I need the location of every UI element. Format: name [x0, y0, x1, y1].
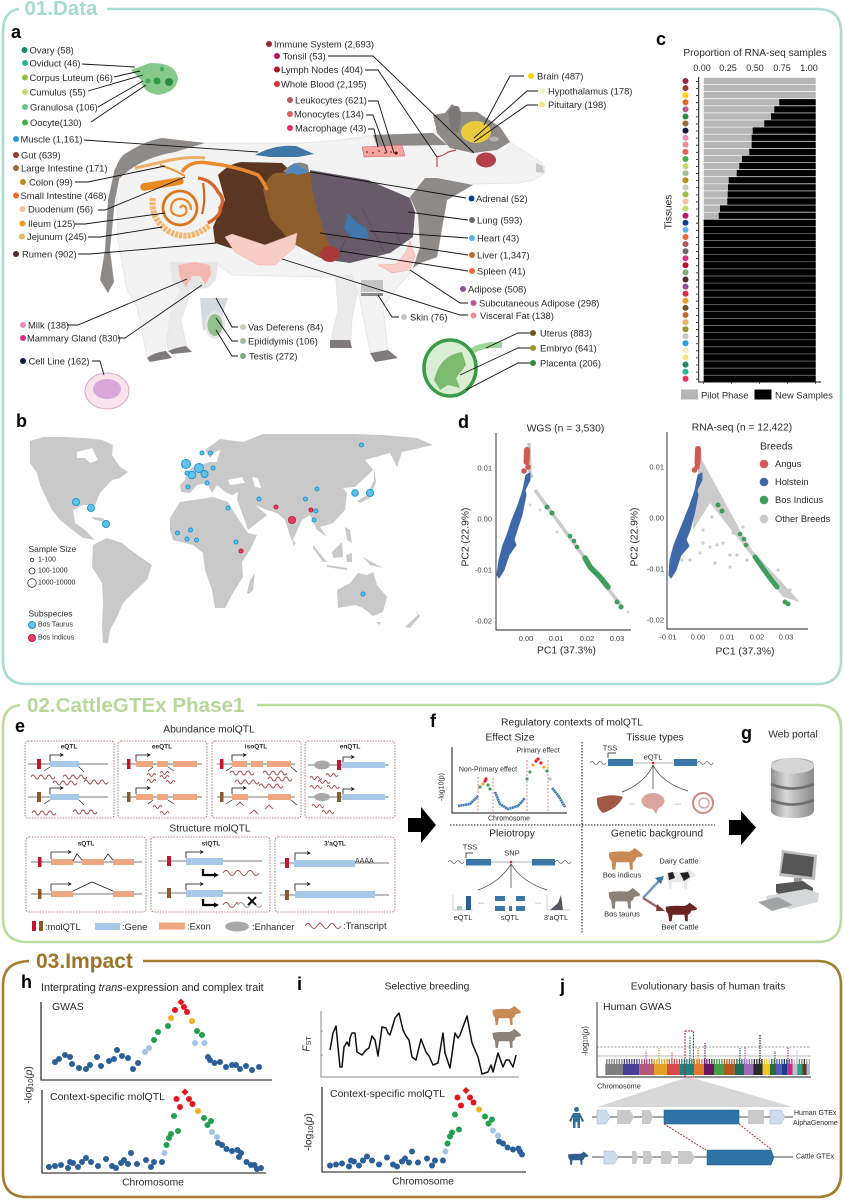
Manhattan plot: Human GWAS	[603, 1001, 671, 1013]
illustration: ovary	[131, 63, 178, 95]
arrow: e to f	[408, 807, 436, 843]
stQTL box	[151, 837, 270, 912]
PCA plot: RNA-seq: PC1 (37.3%)	[716, 646, 774, 658]
tissue labels: immune system	[266, 38, 374, 134]
tissue labels: male reproductive	[240, 322, 323, 362]
context-specific molQTL plot	[322, 1087, 526, 1172]
PCA plot: WGS: 0.01	[549, 634, 563, 643]
panel i: selective breeding: p)	[304, 1113, 314, 1122]
tissue labels: male reproductive: Vas Deferens (84)	[248, 322, 323, 332]
legend: :molQTL	[45, 922, 81, 932]
ortholog connectors	[664, 1124, 772, 1150]
FST line chart: F	[302, 1045, 312, 1052]
tissue labels: male reproductive: Epididymis (106)	[248, 336, 318, 346]
illustration: testis	[200, 298, 228, 339]
axis labels: Chromosome	[122, 1178, 184, 1188]
icon: desktop computer	[758, 850, 819, 911]
breeds legend: Other Breeds	[775, 514, 831, 524]
panel g: web portal: g	[741, 723, 752, 743]
tissue labels: thoracic and abdominal: Visceral Fat (138)	[480, 310, 554, 321]
tissue labels: thoracic and abdominal: Liver (1,347)	[477, 250, 530, 260]
tissue labels: thoracic and abdominal: Adipose (508)	[468, 284, 526, 294]
heading: Interprating trans-expression and complex trait	[41, 982, 264, 994]
bos taurus sample sites	[72, 443, 374, 596]
panel b: world map of samples	[16, 411, 433, 643]
PCA plot: WGS: 0.01	[477, 464, 492, 472]
pleiotropy diagram: TSS	[463, 842, 477, 852]
PCA plot: WGS: 0.03	[610, 634, 624, 643]
panel i: selective breeding	[297, 974, 526, 1188]
Manhattan plot	[580, 1001, 811, 1090]
tissue labels: muscle and gut: Small Intestine (468)	[20, 190, 106, 201]
panel i: selective breeding: 10	[308, 1126, 314, 1134]
pleiotropy diagram: SNP	[504, 848, 520, 858]
heading: Regulatory contexts: Regulatory contexts of molQTL	[501, 718, 643, 728]
genetic background diagram: Bos indicus	[603, 870, 641, 880]
axis labels: Chromosome	[392, 1176, 454, 1188]
tissue labels: brain	[528, 70, 632, 110]
genetic background diagram: Beef Cattle	[661, 922, 699, 932]
panel h: trans-expression: -log	[24, 1087, 34, 1104]
legend	[681, 390, 833, 400]
tissue labels: immune system: Leukocytes (621)	[295, 94, 367, 106]
eQTL box	[25, 741, 114, 818]
panel c: stacked bar chart of RNA-seq proportion: c	[656, 29, 666, 49]
PCA plot: RNA-seq	[630, 422, 808, 658]
effect size chart: Effect Size	[485, 732, 535, 744]
pleiotropy diagram: ...	[478, 898, 484, 906]
organ: visceral fat	[225, 233, 297, 265]
gray coat patches	[115, 138, 205, 178]
tissue labels: uterus, embryo, placenta: Uterus (883)	[540, 328, 592, 338]
panel h: trans-expression: 10	[28, 1079, 34, 1087]
illustration: embryo in uterus	[424, 340, 502, 396]
tissue types diagram	[590, 732, 713, 814]
PCA plot: WGS: -0.01	[475, 566, 492, 574]
panel h: trans-expression	[21, 972, 272, 1188]
panel h: trans-expression: (	[24, 1075, 34, 1079]
top axis tick labels: 0.00	[693, 63, 711, 73]
context-specific molQTL plot: Context-specific molQTL	[330, 1088, 445, 1100]
organ: heart	[344, 213, 369, 238]
heading: 02.CattleGTEx Phase1: 02.CattleGTEx Phase1	[27, 694, 244, 717]
tissue types diagram: ...	[629, 800, 635, 806]
axis title: Tissues: Tissues	[664, 195, 674, 229]
tissue labels: reproductive: Oocyte(130)	[30, 117, 82, 128]
FST line chart	[302, 1006, 521, 1077]
organ: adrenal	[283, 163, 309, 175]
sQTL box: sQTL	[78, 840, 94, 848]
scatter: Bos indicus	[544, 504, 624, 610]
genetic background diagram: Genetic background	[611, 828, 703, 840]
organ: lung	[310, 170, 415, 263]
panel d: PCA plots: d	[458, 412, 469, 432]
scatter: Angus	[521, 450, 531, 474]
Manhattan plot: p)	[580, 1026, 590, 1033]
FST line chart: ST	[306, 1036, 312, 1045]
PCA plot: WGS	[460, 424, 631, 656]
panel c: stacked bar chart of RNA-seq proportion	[656, 29, 833, 400]
human gene row	[592, 1110, 838, 1127]
organ: brain	[461, 121, 491, 143]
scatter: Holstein	[669, 473, 702, 578]
legend: :Transcript	[343, 921, 387, 931]
heading: 03.Impact: 03.Impact	[36, 950, 133, 973]
panel h: trans-expression: h	[21, 972, 32, 992]
tissue labels: brain: Hypothalamus (178)	[548, 86, 632, 96]
tissue labels: reproductive: Ovary (58)	[30, 44, 74, 56]
top axis tick labels: 0.75	[773, 63, 791, 73]
tissue labels: uterus, embryo, placenta: Embryo (641)	[540, 342, 597, 354]
panel i: selective breeding: Selective breeding	[385, 982, 470, 992]
panel: 02 CattleGTEx Phase1	[3, 694, 841, 942]
panel j: evolutionary basis: j	[559, 976, 565, 996]
tissue labels: immune system: Lymph Nodes (404)	[281, 64, 363, 75]
effect size chart: Non-Primary effect	[459, 766, 517, 774]
sQTL box	[26, 837, 146, 912]
bos indicus sample sites	[239, 505, 313, 553]
skin sample	[361, 280, 383, 296]
panel i: selective breeding: i	[297, 974, 302, 994]
genetic background diagram: Bos taurus	[604, 910, 640, 918]
tissue types diagram: ...	[675, 800, 681, 806]
tissue labels: immune system: Tonsil (53)	[282, 50, 326, 62]
blood vessel	[362, 145, 405, 157]
breeds legend	[760, 442, 831, 524]
panel g: web portal	[741, 723, 819, 911]
far legs	[160, 268, 362, 352]
top axis tick labels: 1.00	[800, 63, 818, 73]
panel g: web portal: Web portal	[768, 730, 818, 740]
panel: 01 Data	[3, 0, 841, 684]
organ: rumen	[213, 162, 300, 252]
context-specific molQTL plot	[42, 1088, 266, 1173]
arrow: f to g	[729, 811, 756, 845]
panel i: selective breeding: -log	[304, 1134, 314, 1151]
human gene row: Human GTEx	[794, 1110, 837, 1117]
axes	[697, 77, 821, 384]
effect size chart	[438, 732, 567, 822]
udder base	[170, 262, 218, 290]
organ: tonsil	[476, 152, 496, 168]
tissue labels: milk, mammary, cell line: Mammary Gland (830)	[27, 332, 121, 344]
tissue labels: milk, mammary, cell line: Milk (138)	[28, 320, 69, 330]
Manhattan plot: (	[580, 1033, 590, 1036]
tissue labels: muscle and gut: Jejunum (245)	[27, 231, 87, 242]
PCA plot: RNA-seq: 0.00	[691, 632, 705, 642]
PCA plot: WGS: -0.02	[475, 616, 492, 626]
pleiotropy diagram: ...	[535, 898, 541, 906]
tissue types diagram: TSS	[603, 744, 617, 752]
tissue labels: muscle and gut	[13, 134, 108, 260]
tail	[100, 168, 120, 293]
breeds legend: Angus	[775, 459, 802, 469]
scatter: other breeds	[680, 442, 800, 602]
isoQTL box: isoQTL	[245, 744, 267, 750]
pleiotropy diagram: 3'aQTL	[544, 913, 568, 922]
genetic background diagram: Dairy Cattle	[659, 856, 699, 866]
sample size legend: 1000-10000	[38, 580, 75, 586]
tissue labels: muscle and gut: Ileum (125)	[28, 218, 75, 229]
hooves	[147, 340, 398, 362]
PCA plot: WGS: PC2 (22.9%)	[460, 508, 472, 566]
effect size chart: Chromosome	[488, 816, 530, 822]
pleiotropy diagram: Pleiotropy	[489, 828, 536, 840]
effect size chart: -log10(p)	[438, 773, 446, 801]
tissue labels: muscle and gut: Duodenum (56)	[28, 204, 93, 214]
human gene row: AlphaGenome	[793, 1120, 838, 1127]
eeQTL box: eeQTL	[152, 744, 172, 750]
tissue labels: thoracic and abdominal: Adrenal (52)	[476, 193, 528, 204]
tissue labels: brain: Brain (487)	[537, 70, 583, 82]
icon: dairy cow	[666, 869, 696, 889]
sample size legend	[28, 544, 76, 587]
legend	[32, 921, 387, 932]
panel f: regulatory contexts: f	[430, 711, 437, 731]
cattle gene row: Cattle GTEx	[796, 1154, 835, 1160]
sample size legend: 100-1000	[38, 568, 68, 574]
Manhattan plot: -log	[580, 1043, 590, 1056]
subspecies legend: Bos Taurus	[38, 622, 73, 628]
top axis tick labels: 0.25	[719, 63, 737, 73]
legend: :Exon	[187, 922, 211, 932]
tissue labels: thoracic and abdominal: Subcutaneous Adipose (298)	[479, 298, 599, 308]
PCA plot: RNA-seq: -0.01	[659, 632, 677, 642]
icon: beef cow	[666, 903, 697, 921]
scatter: Bos indicus	[716, 502, 790, 606]
PCA plot: RNA-seq: 0.02	[750, 632, 764, 642]
PCA plot: RNA-seq: 0.00	[649, 514, 664, 522]
tissue labels: reproductive: Granulosa (106)	[30, 102, 98, 112]
tissue labels: thoracic and abdominal: Skin (76)	[410, 312, 448, 322]
isoQTL box	[212, 741, 301, 818]
icon: Bos indicus cow	[609, 848, 643, 870]
PCA plot: RNA-seq: PC2 (22.9%)	[630, 508, 640, 566]
panel j: evolutionary basis	[559, 976, 838, 1165]
Manhattan plot: Chromosome	[597, 1082, 641, 1090]
scatter: Angus	[692, 449, 700, 473]
tissue labels: immune system: Monocytes (134)	[294, 108, 364, 120]
3'aQTL box: 3'aQTL	[324, 840, 346, 848]
inland seas	[77, 448, 261, 488]
panel: 03 Impact	[3, 950, 841, 1197]
legend: :Enhancer	[252, 922, 294, 932]
PCA plot: WGS: 0.02	[580, 634, 594, 643]
eeQTL box	[118, 741, 207, 818]
top axis tick labels: 0.50	[746, 63, 764, 73]
eQTL box: eQTL	[61, 744, 77, 750]
subspecies legend: Bos Indicus	[38, 634, 75, 642]
subspecies legend	[28, 608, 75, 642]
tissue labels: muscle and gut: Large Intestine (171)	[21, 162, 108, 174]
tissue types diagram: eQTL	[644, 752, 662, 762]
tissue labels: reproductive: Oviduct (46)	[30, 58, 81, 68]
context-specific molQTL plot: Context-specific molQTL	[50, 1091, 165, 1103]
legend: :Gene	[122, 922, 147, 932]
cattle gene row	[592, 1150, 835, 1165]
top axis tick labels	[693, 63, 818, 73]
organ: liver	[263, 172, 336, 258]
legend: New Samples	[775, 390, 833, 400]
GWAS plot: GWAS	[52, 1001, 84, 1013]
organ: muscle	[255, 146, 314, 157]
tissue labels: male reproductive: Testis (272)	[249, 350, 297, 362]
PCA plot: WGS: 0.00	[477, 514, 492, 524]
PCA plot: RNA-seq: 0.03	[779, 632, 793, 642]
stQTL box: stQTL	[202, 840, 220, 848]
effect size chart: Primary effect	[516, 748, 560, 754]
tissue labels: reproductive: Cumulus (55)	[30, 86, 86, 98]
tissue labels: immune system: Whole Blood (2,195)	[281, 78, 366, 90]
panel b: world map of samples: b	[16, 411, 27, 431]
tissue labels: uterus, embryo, placenta	[530, 328, 601, 368]
legend: Pilot Phase	[701, 390, 748, 400]
tissue types diagram: Tissue types	[626, 732, 684, 744]
zoom wedge	[597, 1078, 793, 1107]
udder	[178, 262, 211, 287]
scatter: Holstein	[497, 473, 530, 578]
breeds legend: Holstein	[775, 477, 809, 487]
tissue color dots	[682, 78, 688, 382]
PCA plot: WGS: WGS (n = 3,530)	[527, 424, 604, 434]
organ: spleen	[320, 246, 340, 262]
PCA plot: WGS: PC1 (37.3%)	[537, 646, 596, 656]
breeds legend: Bos Indicus	[775, 495, 823, 505]
tissue labels: immune system: Macrophage (43)	[295, 122, 366, 134]
tissue labels: muscle and gut: Muscle (1,161)	[20, 134, 83, 144]
illustration: cell line dish	[85, 373, 129, 409]
breeds legend: Breeds	[760, 442, 793, 452]
sample size legend: Sample Size	[28, 544, 76, 554]
enQTL box	[305, 741, 395, 818]
quadrant dividers	[450, 742, 715, 933]
pleiotropy diagram: eQTL	[454, 913, 472, 922]
cow anatomy illustration	[100, 104, 545, 362]
tissue labels: thoracic and abdominal: Heart (43)	[477, 232, 519, 244]
branching arrows	[643, 876, 665, 911]
genetic background diagram	[603, 828, 703, 932]
icon: database	[771, 758, 814, 818]
GWAS plot	[41, 998, 272, 1080]
panel d: PCA plots	[458, 412, 831, 658]
PCA plot: RNA-seq: -0.02	[647, 616, 664, 624]
PCA plot: RNA-seq: RNA-seq (n = 12,422)	[692, 422, 792, 434]
PCA plot: RNA-seq: -0.01	[647, 564, 664, 574]
tissue labels: muscle and gut: Rumen (902)	[22, 248, 77, 260]
icon: Bos taurus cow	[609, 888, 640, 909]
panel h: trans-expression: p)	[24, 1066, 34, 1075]
tissue labels: milk, mammary, cell line	[20, 320, 121, 366]
tissue labels: reproductive: Corpus Luteum (66)	[30, 72, 113, 83]
tissue labels: thoracic and abdominal: Lung (593)	[477, 214, 522, 226]
intestines	[135, 158, 267, 236]
leader lines	[67, 56, 538, 390]
tissue labels: muscle and gut: Colon (99)	[29, 176, 73, 188]
organ: subcutaneous adipose	[378, 241, 415, 273]
PCA plot: WGS: 0.00	[519, 634, 533, 643]
chart title: Proportion of RNA-seq samples	[683, 48, 827, 59]
sample size legend: 1-100	[38, 556, 56, 564]
cow body	[116, 112, 545, 357]
panel e: molQTL types	[15, 716, 395, 932]
icon: tan cow	[493, 1006, 521, 1025]
heading: Structure molQTL: Structure molQTL	[169, 824, 251, 834]
panel e: molQTL types: e	[15, 716, 25, 736]
heading: Abundance molQTL: Abundance molQTL	[163, 724, 255, 736]
panel f: regulatory contexts	[430, 711, 715, 933]
icon: human	[569, 1107, 584, 1128]
pleiotropy diagram: sQTL	[501, 913, 519, 922]
tissue labels: reproductive	[22, 44, 113, 128]
world map	[30, 434, 433, 643]
panel letter a: a	[11, 22, 22, 42]
panel i: selective breeding: (	[304, 1122, 314, 1126]
panel j: evolutionary basis: Evolutionary basis of human traits	[631, 982, 785, 992]
tissue labels: brain: Pituitary (198)	[548, 99, 606, 110]
3'aQTL box: AAAA	[355, 858, 374, 865]
tissue labels: milk, mammary, cell line: Cell Line (162)	[28, 356, 89, 366]
enQTL box: enQTL	[340, 744, 360, 750]
lymph node squiggle	[437, 150, 456, 167]
3'aQTL box	[275, 837, 395, 912]
icon: cattle	[568, 1152, 588, 1165]
tissue labels: muscle and gut: Gut (639)	[21, 150, 61, 160]
scatter: other breeds	[528, 443, 630, 614]
PCA plot: RNA-seq: 0.01	[720, 632, 734, 642]
pleiotropy diagram	[448, 828, 571, 922]
subspecies legend: Subspecies	[28, 608, 72, 618]
Manhattan plot: 10	[584, 1035, 590, 1043]
tissue labels: thoracic and abdominal	[401, 193, 599, 322]
PCA plot: RNA-seq: 0.01	[649, 462, 664, 472]
bars	[704, 78, 816, 382]
tissue labels: uterus, embryo, placenta: Placenta (206)	[540, 358, 601, 368]
tissue labels: thoracic and abdominal: Spleen (41)	[477, 266, 525, 276]
tissue labels: immune system: Immune System (2,693)	[274, 38, 374, 50]
icon: gray cow	[493, 1029, 521, 1048]
